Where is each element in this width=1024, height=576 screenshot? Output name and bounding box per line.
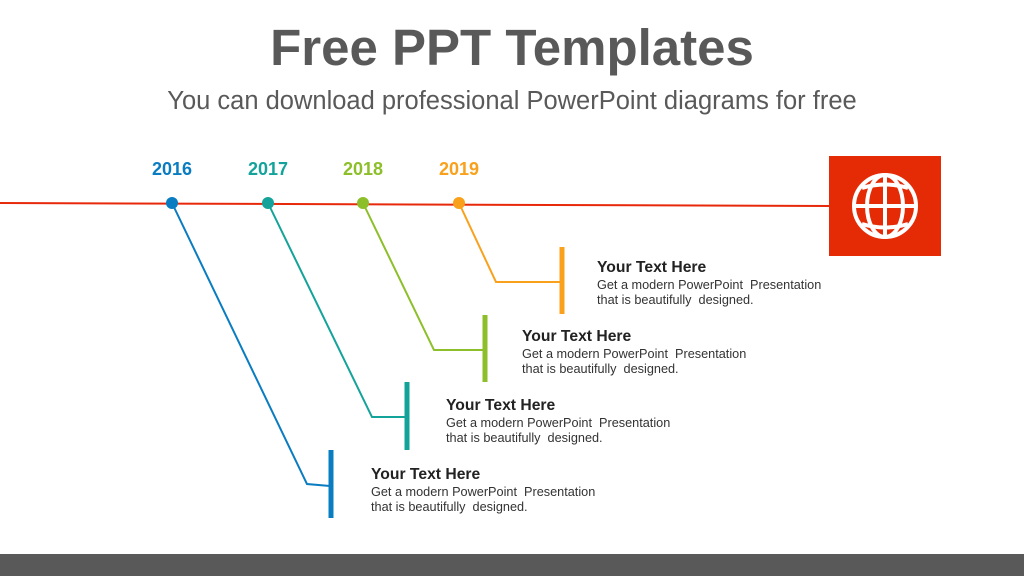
text block 2016: that is beautifully designed. [371, 500, 528, 514]
main line [0, 203, 830, 206]
subtitle: You can download professional PowerPoint diagrams for free [167, 87, 857, 115]
branch 2018 [357, 197, 485, 382]
text block 2018: Get a modern PowerPoint Presentation [522, 347, 746, 361]
text block 2016: Your Text Here [371, 466, 480, 483]
text: 2017 [248, 159, 288, 179]
icon: globe box [829, 156, 941, 256]
text block 2019: Get a modern PowerPoint Presentation [597, 278, 821, 292]
text block 2017: Get a modern PowerPoint Presentation [446, 416, 670, 430]
text: 2018 [343, 159, 383, 179]
branch 2017 [262, 197, 407, 450]
branch 2019 [453, 197, 562, 314]
text block 2017 [446, 397, 670, 445]
text block 2017: that is beautifully designed. [446, 431, 603, 445]
title: Free PPT Templates [270, 19, 754, 76]
text block 2018: Your Text Here [522, 328, 631, 345]
text block 2018 [522, 328, 746, 376]
text block 2017: Your Text Here [446, 397, 555, 414]
text: 2019 [439, 159, 479, 179]
year labels [152, 159, 479, 179]
text block 2019: Your Text Here [597, 259, 706, 276]
text block 2019 [597, 259, 821, 307]
text block 2016: Get a modern PowerPoint Presentation [371, 485, 595, 499]
footer bar [0, 554, 1024, 576]
text block 2019: that is beautifully designed. [597, 293, 754, 307]
text block 2018: that is beautifully designed. [522, 362, 679, 376]
text block 2016 [371, 466, 595, 514]
branch 2016 [166, 197, 331, 518]
text: 2016 [152, 159, 192, 179]
